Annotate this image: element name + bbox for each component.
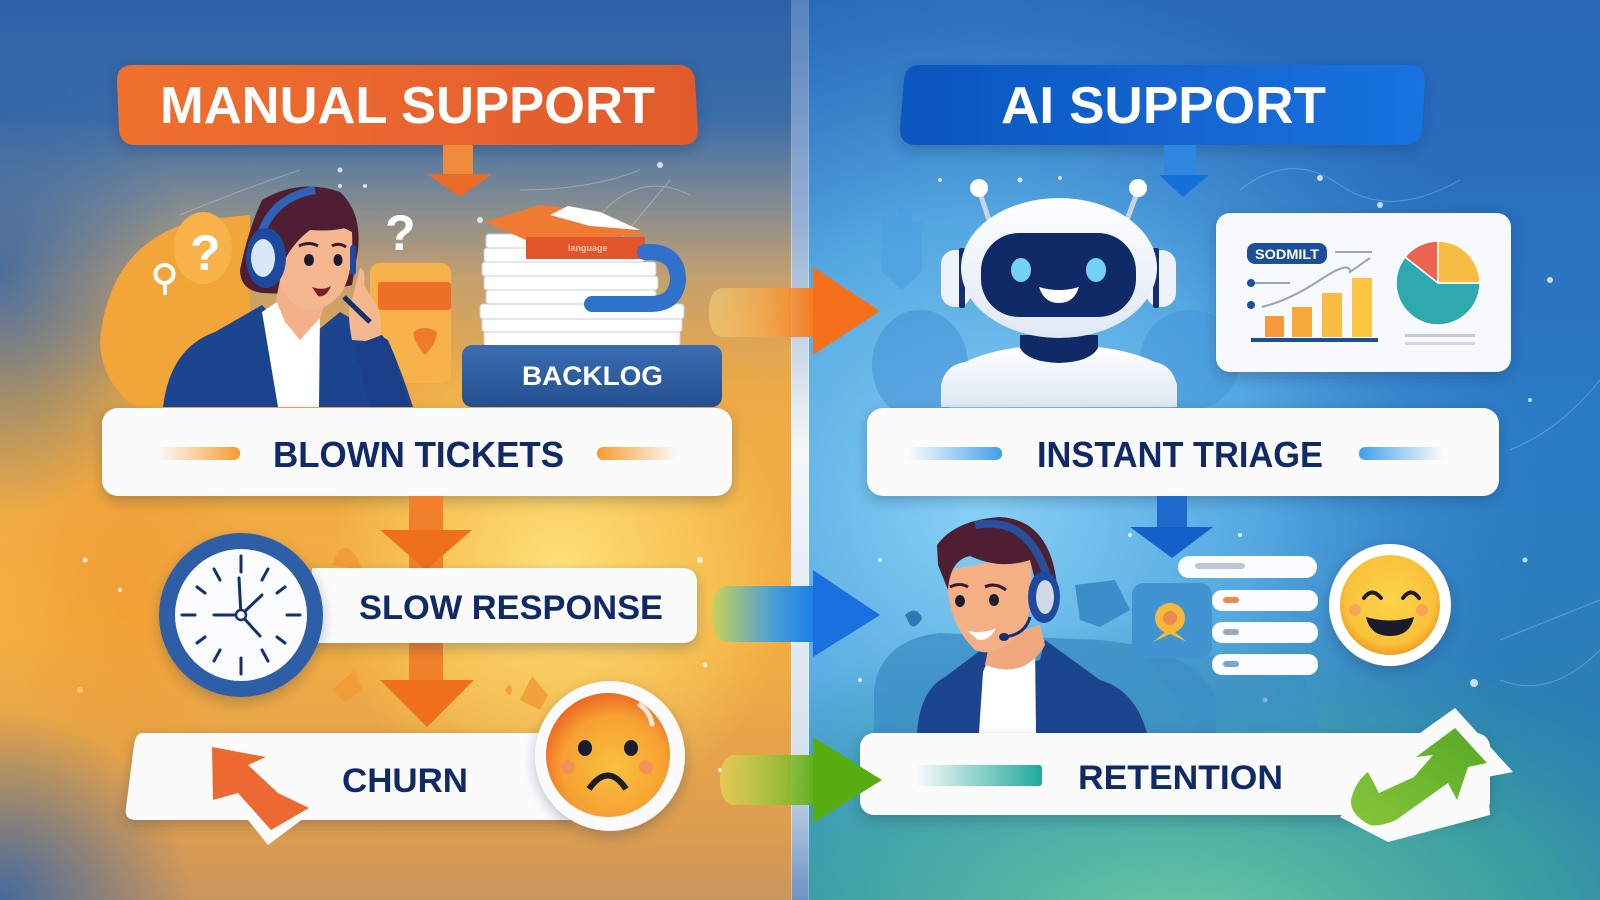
pill: slow response: SLOW RESPONSE	[359, 589, 663, 627]
robot smile	[1039, 287, 1079, 303]
pill: slow response	[312, 568, 697, 643]
icon: happy face	[1329, 544, 1451, 666]
orange book	[485, 205, 645, 259]
background blobs	[872, 310, 968, 420]
pill: retention: RETENTION	[1078, 759, 1283, 797]
pill: instant triage: INSTANT TRIAGE	[1037, 434, 1323, 475]
orange book: language	[568, 243, 608, 253]
pill: blown tickets: BLOWN TICKETS	[273, 434, 564, 475]
pill: retention	[860, 733, 1490, 815]
background: manual side	[0, 0, 792, 900]
faint bars	[882, 208, 922, 290]
question bubble	[174, 212, 232, 284]
scene: agent with questions	[100, 187, 451, 407]
icon: up-trend arrow	[1340, 708, 1513, 842]
title banner: manual support	[117, 65, 698, 145]
submit badge	[1247, 243, 1327, 264]
decorative network sparkles	[77, 162, 1600, 772]
robot neck	[1020, 335, 1098, 363]
pill: churn	[126, 733, 570, 820]
antennas	[970, 179, 1147, 220]
dashboard card	[1216, 213, 1511, 372]
backlog stack	[462, 205, 722, 407]
submit badge: SODMILT	[1255, 246, 1319, 262]
upper papers	[482, 234, 658, 304]
flow arrow: green	[720, 737, 882, 823]
trend line	[1247, 252, 1372, 309]
pill: blown tickets	[102, 408, 732, 496]
arrow: AI banner down	[1159, 145, 1209, 197]
flow arrow: orange	[709, 267, 880, 355]
arrow: instant triage to agent	[1130, 496, 1213, 558]
robot head	[961, 198, 1157, 338]
robot eyes	[1011, 258, 1106, 282]
scene: AI robot	[872, 179, 1240, 420]
pill: churn: CHURN	[342, 762, 468, 800]
icon: down-trend arrow	[205, 747, 312, 845]
orange question backdrop	[100, 215, 250, 407]
icon: clock	[159, 533, 323, 697]
arrow: slow response to churn	[380, 643, 474, 727]
orange panel behind agent	[370, 263, 451, 383]
robot body	[941, 345, 1177, 407]
robot ears	[941, 248, 1176, 308]
background: AI side	[808, 0, 1600, 900]
centre divider	[791, 0, 809, 900]
bar chart	[1251, 278, 1378, 342]
title banner: AI support	[900, 65, 1425, 145]
agent man	[917, 517, 1147, 733]
backlog box: BACKLOG	[522, 361, 663, 391]
small key-shaped question mark	[155, 265, 174, 295]
arrow: manual banner down	[427, 145, 492, 197]
legend lines	[1405, 334, 1475, 345]
question bubble: ?	[190, 225, 221, 281]
award badge	[1132, 583, 1212, 658]
scene: happy agent	[874, 517, 1320, 733]
decorative orange shards	[332, 548, 548, 710]
pill: instant triage	[867, 408, 1499, 496]
title banner: AI support: AI SUPPORT	[1001, 77, 1326, 135]
robot visor	[981, 233, 1136, 317]
pie chart	[1396, 241, 1480, 325]
flow arrow: blue	[712, 570, 880, 657]
arrow: blown tickets to slow response	[380, 496, 472, 571]
title banner: manual support: MANUAL SUPPORT	[160, 77, 655, 135]
white question mark: ?	[385, 205, 416, 261]
ticket list	[1178, 556, 1318, 675]
agent woman	[163, 187, 413, 407]
lower papers	[480, 304, 684, 346]
icon: sad face	[535, 681, 685, 831]
blue binder clip	[592, 252, 678, 304]
blue backdrop	[874, 633, 1216, 733]
backlog box	[462, 345, 722, 407]
